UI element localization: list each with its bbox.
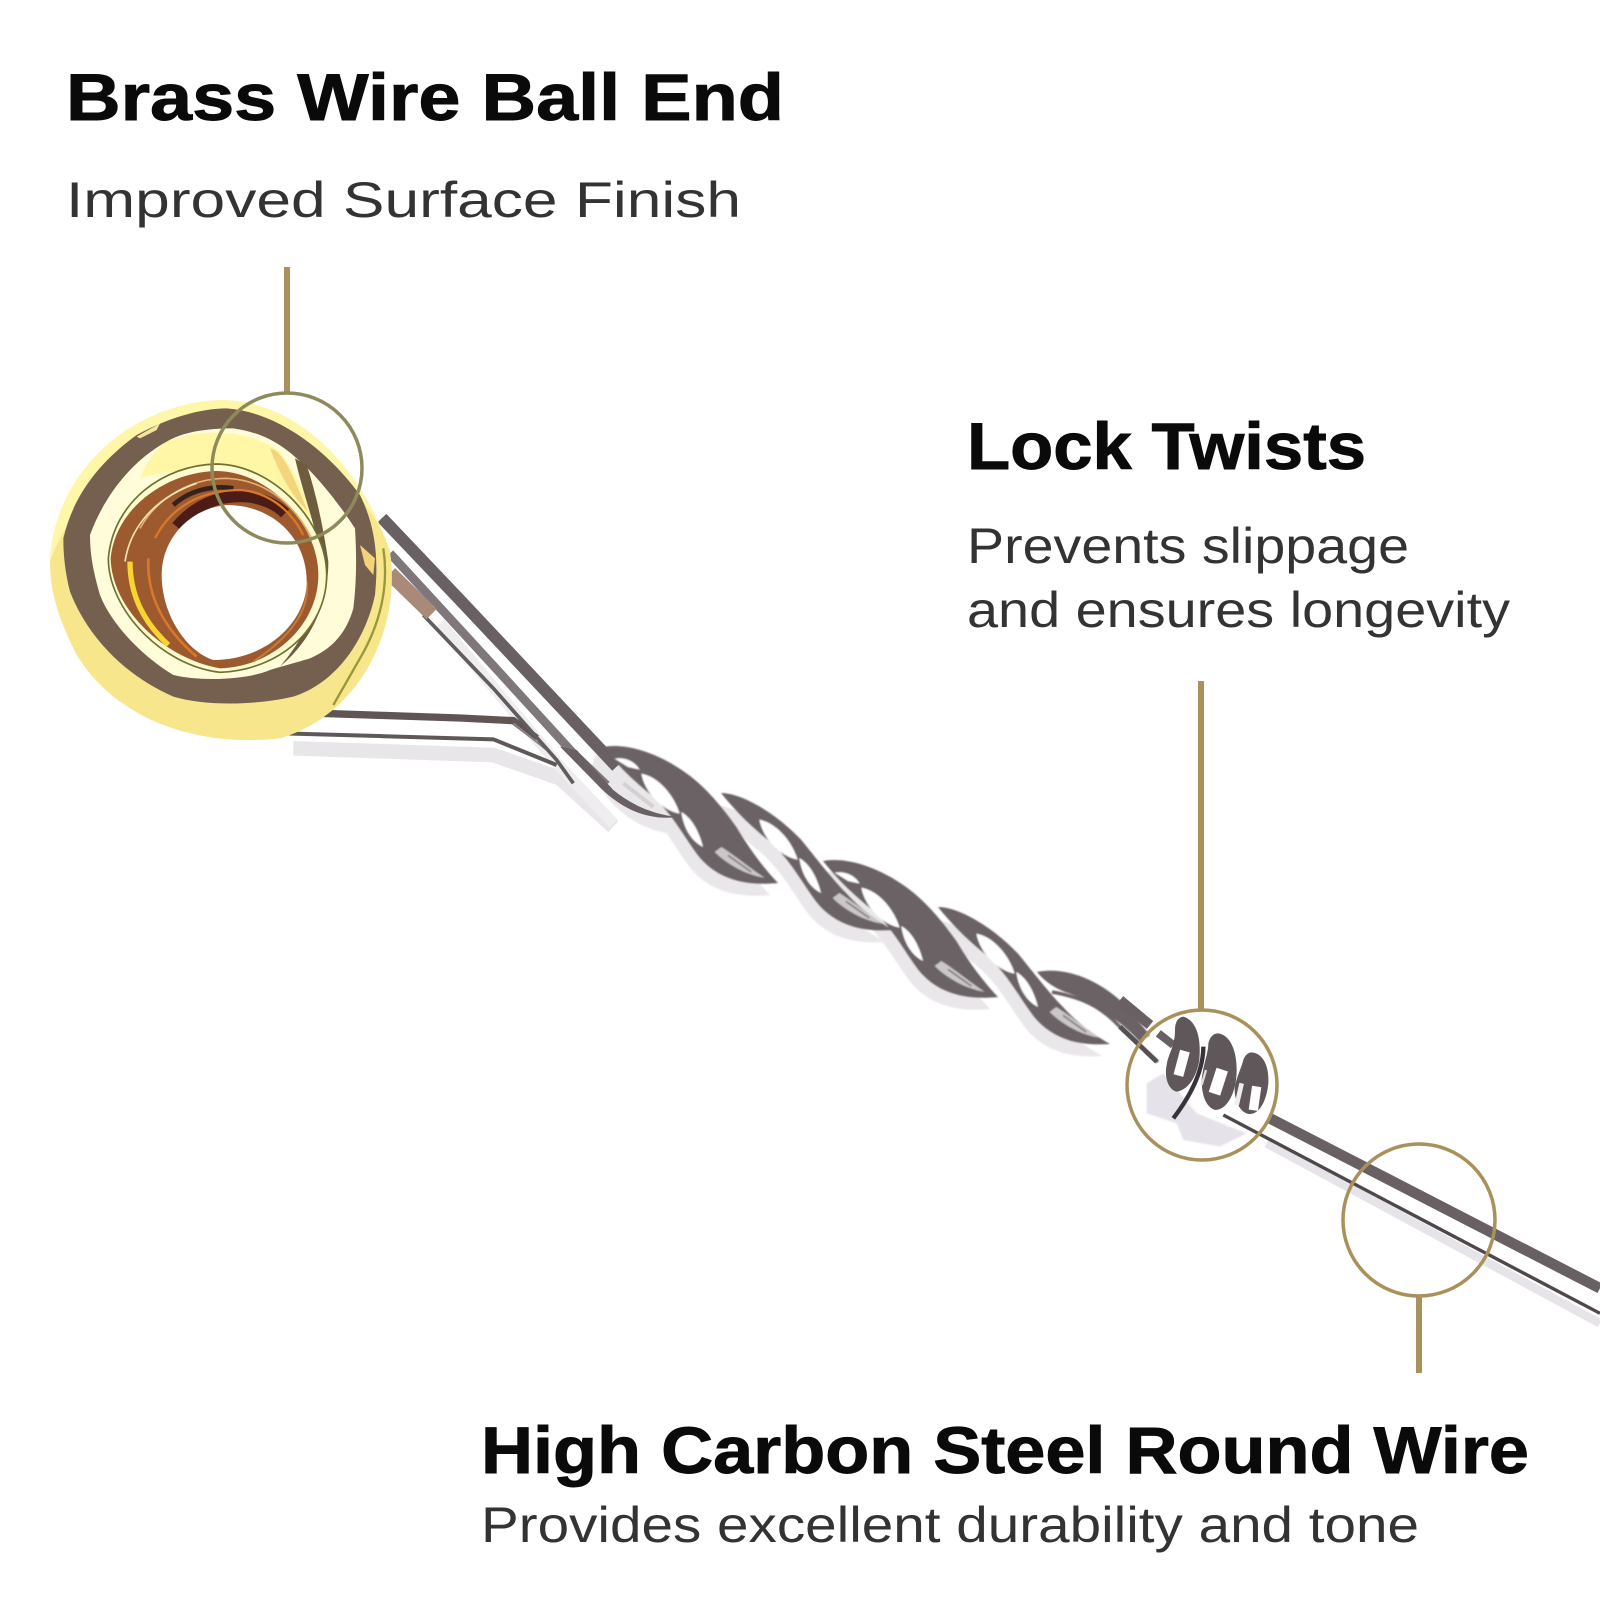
wire: straight section (1223, 1115, 1600, 1323)
ball body (50, 400, 392, 740)
wire: twist shadows (590, 745, 1102, 1056)
ball end: brass (50, 400, 392, 740)
callout: lock twists: and ensures longevity (967, 582, 1510, 638)
heading: High Carbon Steel Round Wire (481, 1413, 1529, 1487)
illustration: guitar string wire (50, 400, 1600, 1323)
callout: high carbon steel round wire (481, 1144, 1529, 1553)
inner face (63, 408, 376, 704)
callout: brass wire ball end (66, 60, 784, 543)
wire: ball end loop (283, 518, 678, 827)
heading: Brass Wire Ball End (66, 60, 784, 134)
subheading: Provides excellent durability and tone (481, 1497, 1419, 1553)
leader line and ring (1127, 681, 1277, 1160)
hole (162, 505, 307, 660)
wire: lock twist coil (1120, 1000, 1268, 1147)
callout: lock twists (967, 409, 1510, 1160)
leader line and ring (212, 267, 362, 543)
heading: Lock Twists (967, 409, 1366, 483)
subheading: Improved Surface Finish (66, 172, 741, 228)
leader line and ring (1343, 1144, 1495, 1373)
copper winding (108, 464, 327, 672)
brown reflective ring (63, 408, 376, 704)
brown branch and highlights (280, 458, 328, 667)
subheading: Prevents slippage (967, 518, 1409, 574)
wire: twisted strands (603, 746, 1158, 1062)
